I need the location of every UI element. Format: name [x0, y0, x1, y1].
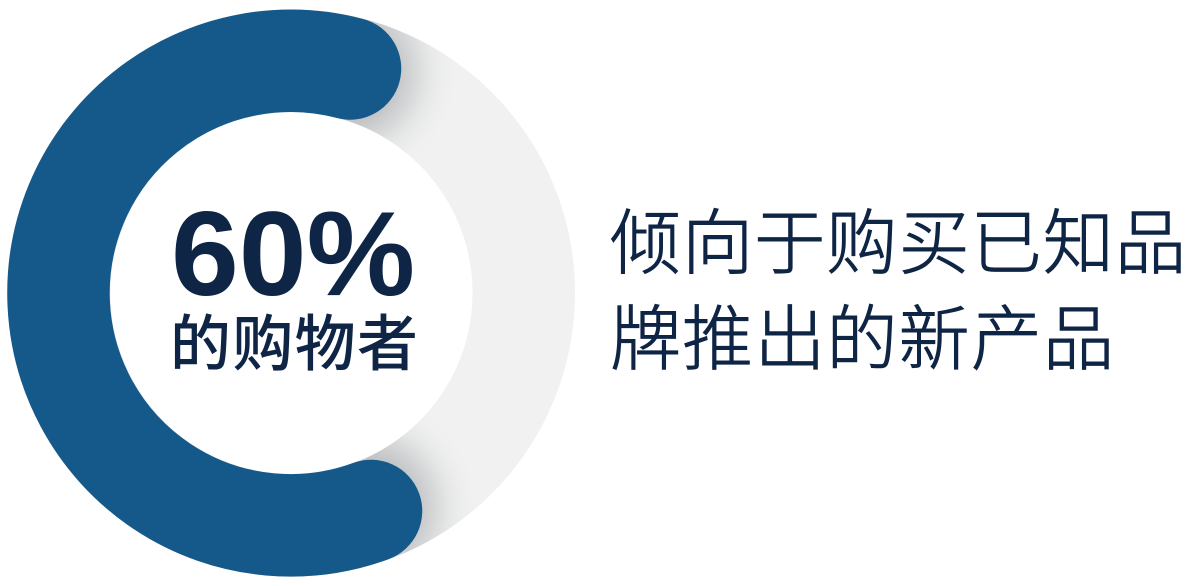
label: shoppers: 的购物者: [170, 294, 418, 383]
center label: [170, 187, 418, 383]
line 2: 牌推出的新产品: [610, 283, 1114, 385]
remaining ring track: [59, 61, 524, 525]
line 1: 倾向于购买已知品: [610, 187, 1186, 289]
blue 60% arc: [58, 61, 371, 525]
description text: [610, 187, 1186, 385]
value: 60%: 60%: [171, 187, 415, 321]
cap shadows: [303, 10, 454, 572]
donut chart: 60%: [58, 0, 560, 586]
